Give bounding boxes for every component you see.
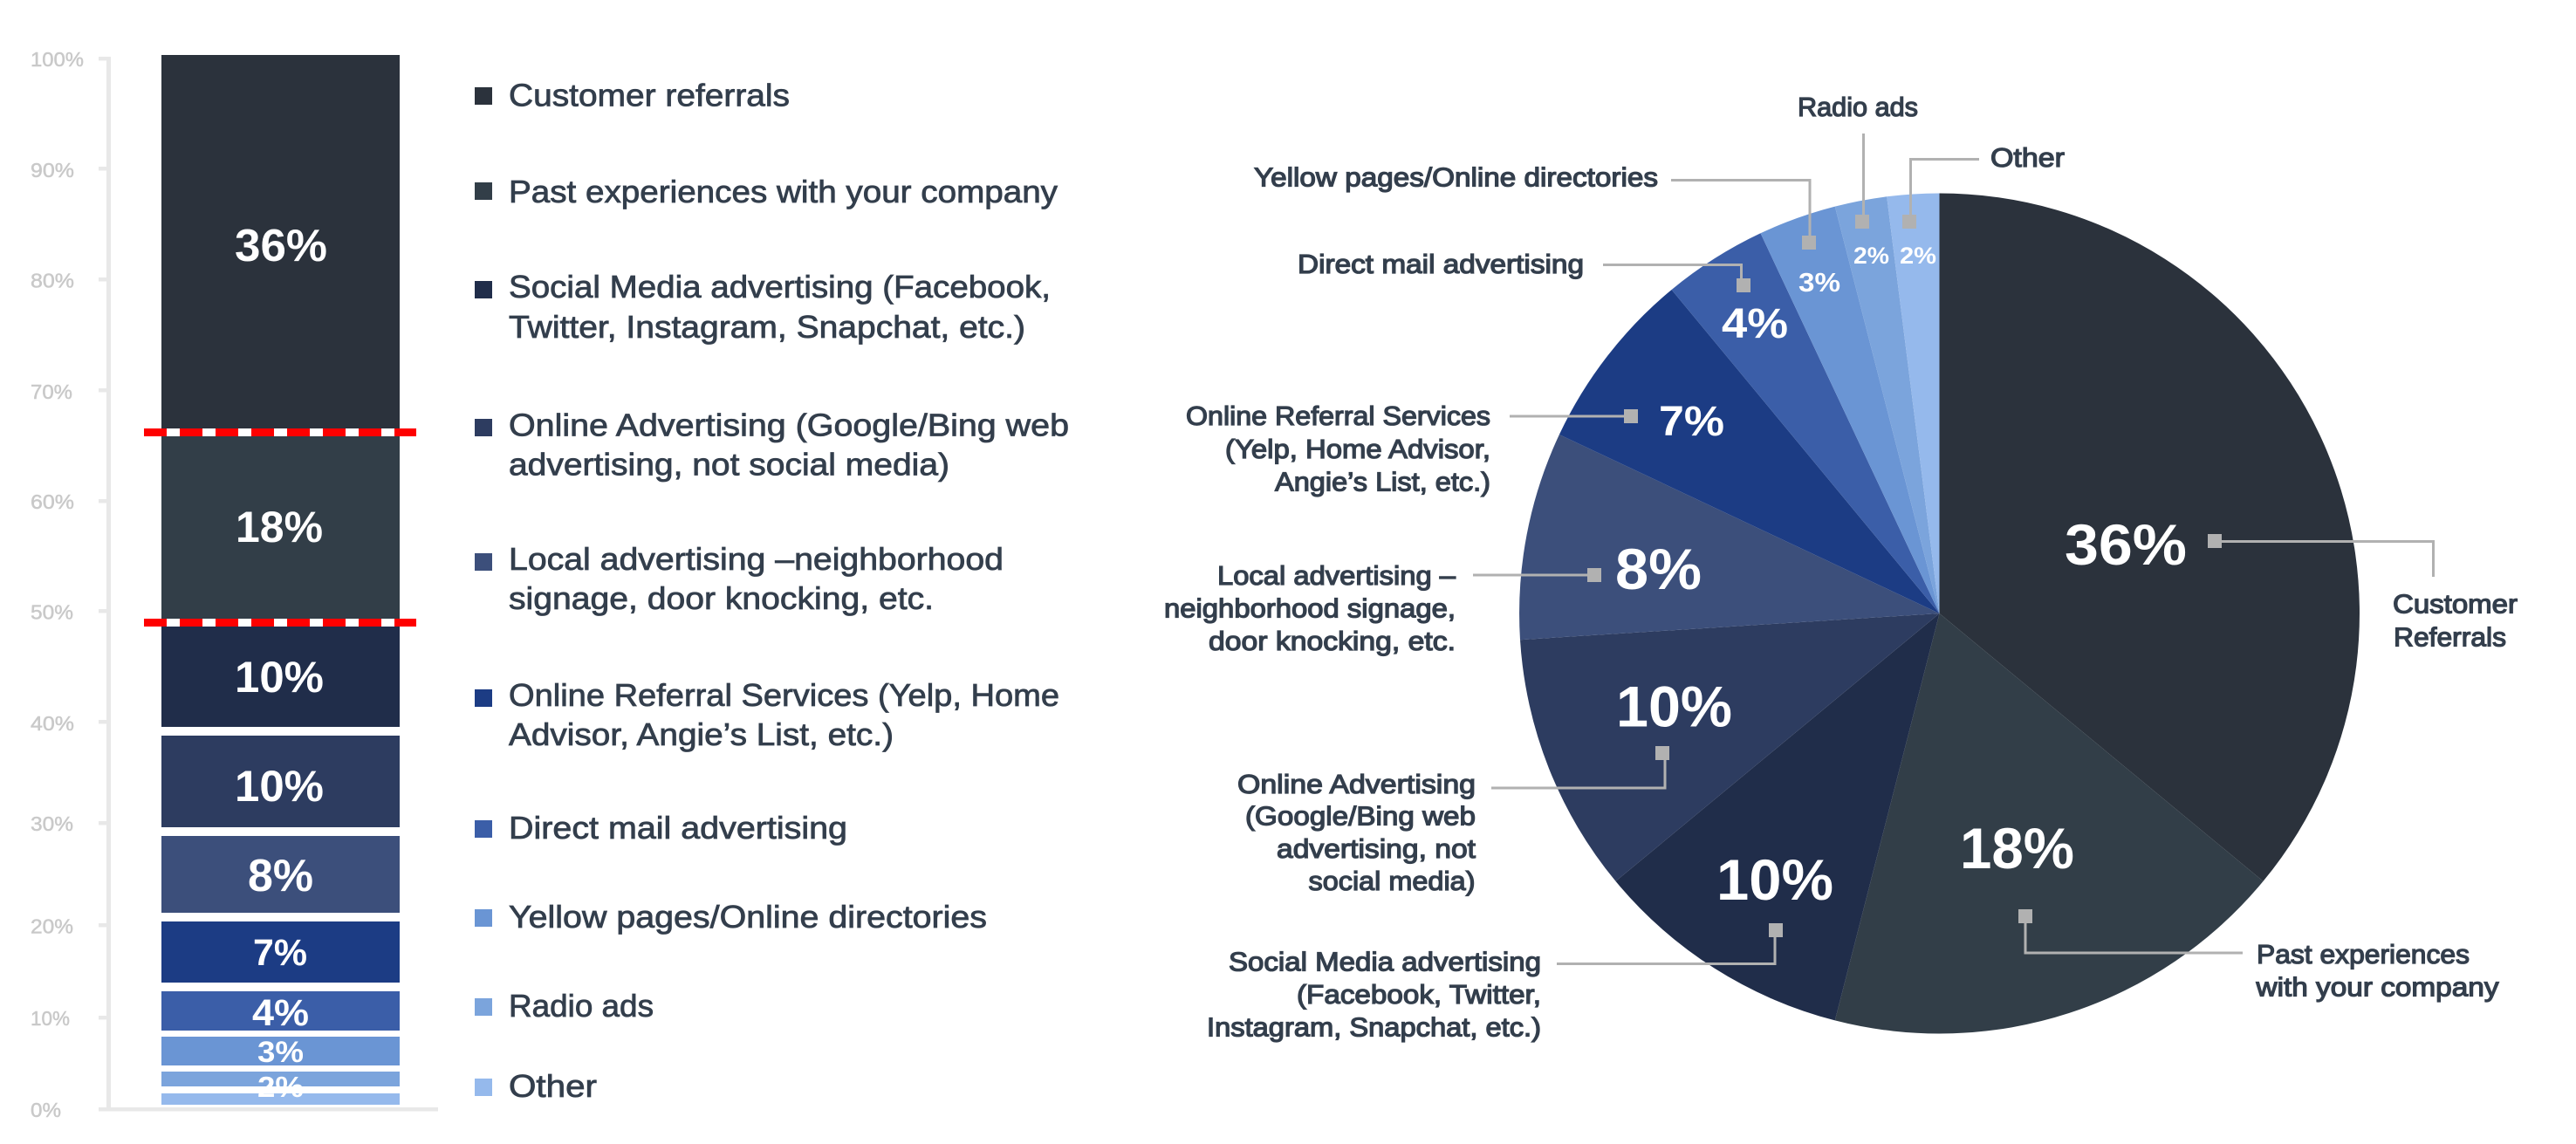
callout: social media advertising: Social Media advertising [1229, 946, 1541, 977]
stacked bar chart: 4% [252, 992, 309, 1034]
pie percentages: 10% [1616, 674, 1732, 738]
stacked bar chart: 8% [248, 851, 313, 901]
legend: Yellow pages/Online directories [509, 899, 987, 935]
legend: Online Referral Services (Yelp, Home [509, 677, 1059, 713]
stacked bar axis: 60% [31, 490, 74, 513]
callout: past experiences: with your company [2255, 972, 2499, 1003]
callout: online advertising: advertising, not [1277, 833, 1476, 864]
stacked bar axis: 20% [31, 915, 73, 937]
stacked bar chart: 18% [236, 503, 323, 551]
callout: online advertising: (Google/Bing web [1245, 801, 1476, 832]
callout: online advertising: Online Advertising [1237, 769, 1476, 799]
stacked bar chart: 2% [257, 1071, 304, 1103]
callout: online referral services: Angie’s List, etc.) [1275, 466, 1490, 497]
legend: Advisor, Angie’s List, etc.) [509, 716, 894, 752]
callout: direct mail advertising [1298, 249, 1750, 292]
stacked bar chart: 10% [235, 762, 324, 811]
callout: online referral services: Online Referral Services [1186, 401, 1490, 431]
stacked bar axis: 90% [31, 159, 74, 182]
legend: Local advertising –neighborhood [509, 541, 1004, 577]
callout: customer referrals [2208, 534, 2518, 653]
legend: Customer referrals [509, 77, 790, 113]
stacked bar chart: 7% [253, 932, 307, 974]
callout: online referral services: (Yelp, Home Advisor, [1225, 434, 1490, 464]
legend [475, 77, 1069, 1104]
stacked bar chart [161, 55, 400, 1105]
stacked bar axis: 40% [31, 712, 74, 735]
pie percentages: 7% [1659, 399, 1724, 445]
pie percentages: 2% [1853, 243, 1889, 269]
legend: Online Advertising (Google/Bing web [509, 407, 1069, 443]
stacked bar axis [31, 48, 438, 1121]
stacked bar chart: 36% [235, 221, 327, 271]
callout: online referral services [1186, 401, 1638, 497]
legend: Radio ads [509, 988, 654, 1024]
callout: social media advertising [1207, 923, 1783, 1043]
callout: past experiences: Past experiences [2257, 939, 2470, 969]
callout: social media advertising: Instagram, Snapchat, etc.) [1207, 1012, 1541, 1043]
stacked bar axis: 10% [31, 1007, 70, 1030]
legend: Other [509, 1068, 597, 1104]
callout: yellow pages: Yellow pages/Online directories [1254, 162, 1658, 193]
stacked bar chart: 10% [235, 653, 324, 702]
callout: radio ads [1798, 92, 1918, 229]
stacked bar axis: 100% [31, 48, 84, 71]
callout: past experiences [2018, 909, 2499, 1003]
pie percentages: 3% [1798, 267, 1840, 298]
stacked bar axis: 0% [31, 1099, 61, 1121]
pie percentages: 18% [1960, 816, 2074, 880]
callout: social media advertising: (Facebook, Twitter, [1297, 979, 1541, 1010]
red dashed threshold lines [144, 428, 416, 627]
stacked bar axis: 30% [31, 812, 73, 835]
callout: local advertising: door knocking, etc. [1209, 626, 1456, 656]
stacked bar chart: 3% [257, 1036, 304, 1069]
stacked bar axis: 80% [31, 269, 74, 291]
callout: local advertising: Local advertising – [1217, 560, 1456, 591]
callout: customer referrals: Customer [2393, 589, 2518, 620]
legend: signage, door knocking, etc. [509, 580, 934, 616]
pie percentages: 8% [1615, 537, 1702, 601]
callout: yellow pages [1254, 162, 1816, 250]
legend: advertising, not social media) [509, 447, 949, 482]
legend: Social Media advertising (Facebook, [509, 269, 1051, 305]
callout: other: Other [1990, 142, 2065, 173]
callout: direct mail advertising: Direct mail advertising [1298, 249, 1584, 279]
pie percentages [1615, 243, 2187, 912]
callout: local advertising: neighborhood signage, [1164, 593, 1456, 623]
pie percentages: 4% [1722, 301, 1788, 347]
pie chart [1519, 194, 2360, 1034]
stacked bar axis: 50% [31, 600, 73, 623]
callout: online advertising [1237, 746, 1669, 896]
legend: Past experiences with your company [509, 174, 1058, 209]
legend: Twitter, Instagram, Snapchat, etc.) [509, 309, 1025, 345]
callout: radio ads: Radio ads [1798, 92, 1918, 122]
pie percentages: 2% [1900, 243, 1936, 269]
legend: Direct mail advertising [509, 810, 847, 846]
pie percentages: 10% [1716, 847, 1833, 912]
stacked bar axis: 70% [31, 380, 72, 403]
callout: local advertising [1164, 560, 1601, 656]
callout: customer referrals: Referrals [2394, 622, 2506, 653]
pie percentages: 36% [2065, 512, 2187, 577]
callout: other [1902, 142, 2065, 229]
callout: online advertising: social media) [1309, 866, 1475, 896]
